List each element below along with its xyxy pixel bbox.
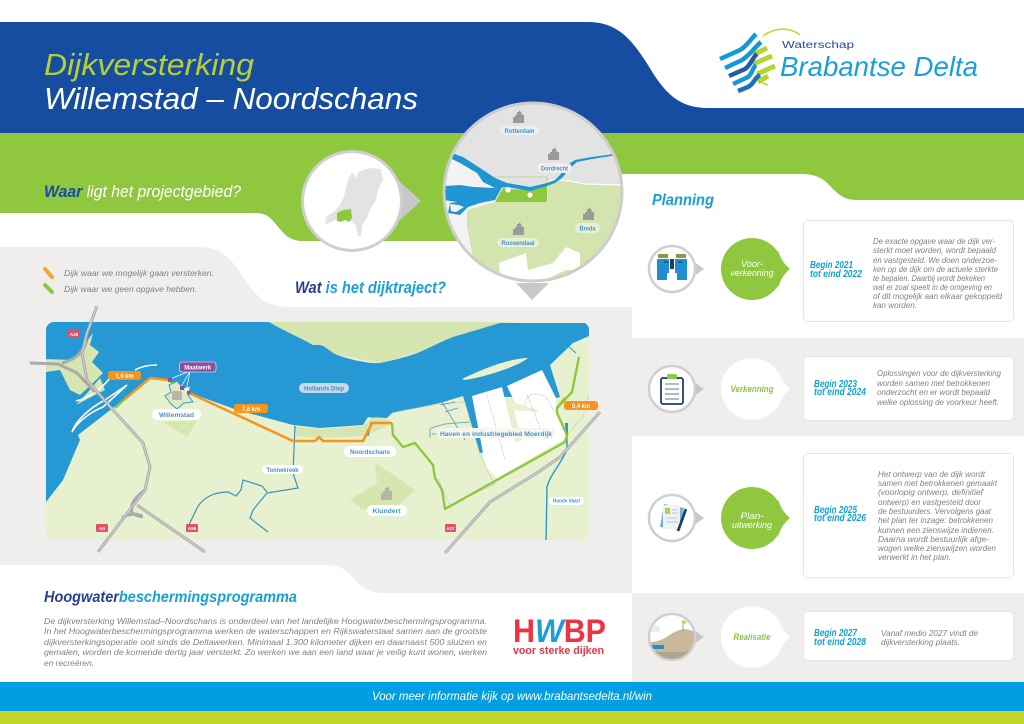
icon: dike with flag <box>649 614 704 660</box>
card: samen met betrokkenen gemaakt <box>878 478 998 488</box>
panel: grey map background <box>0 247 632 593</box>
card: Begin 2021 <box>810 260 853 271</box>
body text <box>44 616 487 668</box>
card: De exacte opgave waar de dijk ver- <box>873 236 995 246</box>
card: welke oplossing de voorkeur heeft. <box>877 397 999 407</box>
region: west land <box>446 159 498 255</box>
locator map: Netherlands <box>302 152 421 250</box>
map: canals <box>188 426 298 532</box>
title: Dijkversterking <box>44 47 254 82</box>
road shields: A59 <box>188 526 197 531</box>
road shields: A4 <box>99 526 105 531</box>
heading: waar ligt het projectgebied: Waar ligt het projectgebied? <box>44 182 242 201</box>
step bubble <box>721 358 790 420</box>
card: verwerkt in het plan. <box>878 552 951 562</box>
map: dike green <box>115 357 579 509</box>
card: Daarna wordt bestuurlijk afge- <box>878 534 989 544</box>
body text: gemalen, worden de komende dertig jaar versterkt. Zo werken we aan een land waar je veilig kunt wonen, werken <box>44 647 487 657</box>
map: dike route <box>30 306 600 553</box>
card: worden samen met betrokkenen <box>877 378 990 388</box>
label: Maatwerk <box>180 362 216 372</box>
card: Oplossingen voor de dijkversterking <box>877 368 1001 378</box>
road shields: A17 <box>446 526 455 531</box>
label: Roode Vaart: Roode Vaart <box>553 499 580 505</box>
card <box>804 454 1014 578</box>
step bubble: Verkenning <box>730 384 774 394</box>
step bubble <box>721 487 790 549</box>
label: Klundert with town icon <box>367 486 407 516</box>
card: of dit mogelijk aan elkaar gekoppeld <box>873 291 1002 301</box>
card: tot eind 2022 <box>810 269 862 280</box>
label: Maatwerk: Maatwerk <box>184 364 211 372</box>
body text: en recreëren. <box>44 658 94 668</box>
region: white estuary <box>499 247 580 282</box>
heading: Planning: Planning <box>652 192 714 209</box>
card: te bepalen. Daarbij wordt bekeken <box>873 273 985 283</box>
logo: Waterschap Brabantse Delta: Brabantse Delta <box>780 51 978 82</box>
step 3: planuitwerking <box>649 454 1014 578</box>
map: dotted harbour lines <box>393 394 589 505</box>
step bubble: uitwerking <box>732 520 772 530</box>
icons: cities <box>513 110 594 235</box>
step bubble <box>721 606 790 668</box>
step 2: verkenning <box>649 356 1014 420</box>
card: kunnen een zienswijze indienen. <box>878 525 994 535</box>
card: ontwerp) en vastgesteld door <box>878 497 982 507</box>
card: ken op de dijk om de actuele sterkte <box>873 264 998 274</box>
step 4: realisatie <box>649 606 1014 668</box>
card <box>804 612 1014 660</box>
road shields <box>68 330 456 532</box>
logo: HWBP: voor sterke dijken <box>513 645 604 657</box>
card: Begin 2023 <box>814 379 857 390</box>
label: Tonnekreek <box>262 465 303 474</box>
footer bars <box>0 682 1024 724</box>
card: en vastgesteld. We doen onderzoe- <box>873 255 997 265</box>
labels: cities: Dordrecht <box>541 166 569 172</box>
legend: Dijk waar we geen opgave hebben. <box>64 284 197 294</box>
card: Vanaf medio 2027 vindt de <box>881 628 978 638</box>
body text: dijkversterkingsoperatie ooit sinds de Deltawerken. Minimaal 1.300 kilometer dijken en daarnaast 500 sluizen en <box>44 637 487 647</box>
legend: green swatch <box>45 285 52 292</box>
labels: cities: Roosendaal <box>502 240 535 247</box>
label: Hollands Diep: Hollands Diep <box>304 386 344 392</box>
step 1: voorverkenning <box>649 220 1014 322</box>
card: wat er zoal speelt in de omgeving en <box>873 282 992 292</box>
body text: In het Hoogwaterbeschermingsprogramma werken de waterschappen en Rijkswaterstaat samen aan de grootste <box>44 626 487 636</box>
label: Tonnekreek: Tonnekreek <box>266 467 299 474</box>
card: tot eind 2028 <box>814 637 866 648</box>
map: Maatwerk markers <box>168 371 190 394</box>
label: 0,4 km <box>564 401 598 410</box>
card: tot eind 2026 <box>814 513 866 524</box>
map: fields <box>163 421 197 437</box>
card: kan worden. <box>873 300 917 310</box>
card: dijkversterking plaats. <box>881 637 960 647</box>
map: water <box>40 318 589 502</box>
label: Hollands Diep <box>299 383 349 393</box>
icon: document and pen <box>649 495 704 541</box>
heading: wat is het dijktraject: Wat is het dijktraject? <box>295 278 447 297</box>
label: 1,6 km <box>108 371 141 380</box>
body text: De dijkversterking Willemstad–Noordschans is onderdeel van het landelijke Hoogwaterbeschermingsprogramma. <box>44 616 487 626</box>
title <box>44 47 418 116</box>
labels: cities: Rotterdam <box>504 128 535 135</box>
panel: planning grey bands <box>632 338 1024 682</box>
card: Begin 2025 <box>814 505 857 516</box>
icon: binoculars <box>649 246 704 292</box>
card: Het ontwerp van de dijk wordt <box>878 469 986 479</box>
map: south river strip <box>293 418 392 438</box>
legend <box>45 268 214 294</box>
card <box>804 356 1014 420</box>
labels: cities: Breda <box>580 226 596 232</box>
label: Noordschans <box>344 446 396 457</box>
logo: Waterschap Brabantse Delta: Waterschap <box>782 40 855 51</box>
map: harbour <box>463 396 483 453</box>
card: wogen welke zienswijzen worden <box>878 543 996 553</box>
card <box>804 220 1014 322</box>
icon: clipboard <box>649 366 704 412</box>
heading: Hoogwaterbeschermingsprogramma: Hoogwaterbeschermingsprogramma <box>44 589 297 606</box>
card: Begin 2027 <box>814 628 857 639</box>
label: Willemstad <box>152 409 201 420</box>
logo: HWBP: HWBP <box>513 613 606 649</box>
map: north bank <box>269 322 518 363</box>
labels: cities <box>497 126 600 247</box>
label: Haven en industriegebied Moerdijk <box>437 428 555 438</box>
step bubble: verkenning <box>730 268 774 278</box>
region: south land <box>467 180 620 278</box>
panel: HWBP text <box>44 589 487 668</box>
map: dike orange <box>115 357 579 509</box>
legend: orange swatch <box>45 269 52 277</box>
label: Haven en industriegebied Moerdijk: Haven en industriegebied Moerdijk <box>440 431 552 438</box>
region: white coastline <box>548 180 622 185</box>
label: 7,6 km: 7,6 km <box>242 406 260 413</box>
label: 1,6 km: 1,6 km <box>116 373 134 380</box>
locator map: region zoom <box>440 103 622 300</box>
card: het plan ter inzage: betrokkenen <box>878 515 993 525</box>
map: sandbank <box>462 358 528 380</box>
project dots <box>505 187 533 198</box>
title: Willemstad – Noordschans <box>44 81 418 116</box>
region: project area <box>495 186 547 202</box>
label: Roode Vaart <box>549 497 584 505</box>
legend: Dijk waar we mogelijk gaan versterken. <box>64 268 214 278</box>
logo: Waterschap Brabantse Delta <box>720 29 978 91</box>
card: tot eind 2024 <box>814 387 866 398</box>
region: water <box>452 153 614 191</box>
map: motorways <box>30 306 600 553</box>
map: Willemstad star <box>165 381 193 409</box>
map: land <box>46 322 589 540</box>
card: de bestuurders. Vervolgens gaat <box>878 506 992 516</box>
map: harbour canals <box>430 396 470 440</box>
card: onderzocht en er wordt bepaald <box>877 387 990 397</box>
map: peninsula <box>40 333 103 395</box>
step bubble <box>721 238 790 300</box>
region: dotted boundary <box>495 177 547 200</box>
label: 0,4 km: 0,4 km <box>572 403 590 410</box>
footer bars: Voor meer informatie kijk op www.brabantsedelta.nl/win <box>372 691 652 703</box>
label: Willemstad: Willemstad <box>159 412 194 419</box>
label: Noordschans: Noordschans <box>350 449 390 456</box>
label: 7,6 km <box>234 404 268 413</box>
step bubble: Realisatie <box>734 632 770 642</box>
card: (voorlopig ontwerp, definitief <box>878 487 985 497</box>
panel: blue header <box>0 22 1024 133</box>
step bubble: Voor- <box>741 259 763 269</box>
label: Klundert with town icon: Klundert <box>372 508 401 515</box>
map: sand strips <box>72 365 157 432</box>
region: white estuary island <box>450 204 464 212</box>
step bubble: Plan- <box>740 511 764 521</box>
panel: green band <box>0 133 1024 241</box>
road shields: A29 <box>70 332 79 337</box>
card: sterkt moet worden, wordt bepaald <box>873 245 996 255</box>
